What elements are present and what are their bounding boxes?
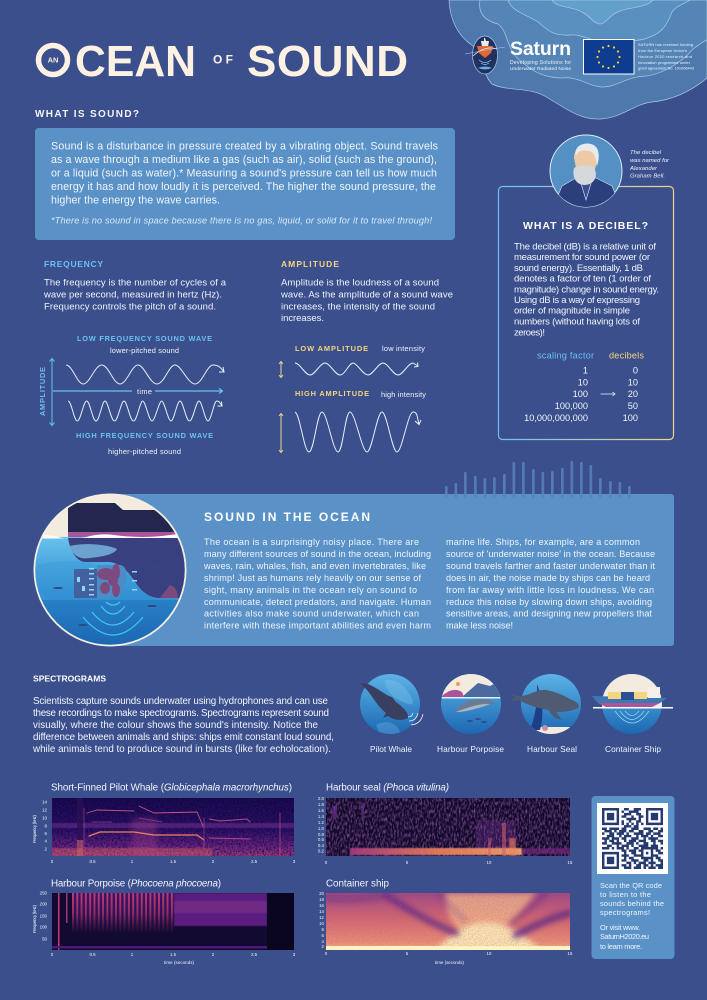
left column text: communicate, detect predators, and navigate. Human xyxy=(204,597,431,607)
axis labels xyxy=(32,890,296,965)
heading: what is sound: WHAT IS SOUND? xyxy=(35,109,139,120)
table: scaling factor to decibels: scaling factor xyxy=(537,350,594,360)
panel: what is sound: or a liquid (such as water).* Measuring a sound's pressure can tell us how much xyxy=(51,168,437,180)
table: scaling factor to decibels: 10 xyxy=(628,378,638,388)
left column text: sight, many animals in the ocean rely on sound to xyxy=(204,585,417,595)
EU funding text: innovation programme under xyxy=(638,60,691,65)
panel: what is sound: higher the energy the wave carries. xyxy=(51,194,220,206)
axis labels: 1.5 xyxy=(170,859,177,864)
panel: what is a decibel xyxy=(498,186,674,440)
high frequency wave xyxy=(68,401,222,421)
axis labels: 0.8 xyxy=(318,832,325,837)
panel: what is a decibel: WHAT IS A DECIBEL? xyxy=(523,220,648,232)
axis labels: 1.8 xyxy=(318,802,325,807)
amplitude diagram: low intensity xyxy=(382,344,425,353)
panel: what is a decibel: magnitude) change in sound energy. xyxy=(514,284,659,296)
axis labels: 3 xyxy=(293,952,296,957)
panel: what is a decibel: sound energy). Essentially, 1 dB xyxy=(514,263,643,274)
axis labels: 8 xyxy=(45,824,48,828)
frequency diagram: lower-pitched sound xyxy=(110,346,179,355)
spectrogram: container ship: Container ship xyxy=(326,878,390,890)
axis labels: Frequency (kHz) xyxy=(32,814,37,843)
axis labels: time (seconds) xyxy=(164,960,195,965)
axis labels: 4 xyxy=(45,838,48,844)
spectrograms text xyxy=(32,696,334,755)
axis labels: 1.0 xyxy=(318,826,325,831)
axis labels: 10 xyxy=(487,951,492,956)
spectrograms text: while animals tend to produce sound in bursts (like for echolocation). xyxy=(32,744,331,755)
low amplitude arrow xyxy=(279,362,283,378)
right column text: make less noise! xyxy=(446,620,513,630)
axis labels: 10 xyxy=(42,816,48,820)
EU funding text: SATURN has received funding xyxy=(638,42,693,47)
axis labels: 2 xyxy=(45,846,48,852)
axis labels xyxy=(32,800,296,864)
axis labels: 1.4 xyxy=(318,814,325,819)
high amplitude wave xyxy=(295,412,421,452)
axis labels: 0 xyxy=(51,952,54,957)
axis labels: 0.5 xyxy=(89,952,96,957)
frequency text: wave per second, measured in hertz (Hz). xyxy=(43,290,222,300)
panel: what is sound: energy it has and how loudly it is perceived. The higher the sound pressure, the xyxy=(51,181,436,193)
axis labels: 50 xyxy=(42,936,48,942)
spectrogram: harbour porpoise: Harbour Porpoise (Phocoena phocoena) xyxy=(51,878,221,890)
panel: what is a decibel: zeroes)! xyxy=(514,328,545,338)
icon labels xyxy=(370,744,661,754)
right column text: source of 'underwater noise' in the ocean. Because xyxy=(446,549,655,559)
axis labels: 14 xyxy=(42,800,48,804)
amplitude axis xyxy=(50,358,54,426)
table: scaling factor to decibels: 100,000 xyxy=(555,401,588,411)
axis labels: 0.2 xyxy=(318,848,325,854)
axis labels: 2.5 xyxy=(251,859,258,864)
QR caption: to listen to the xyxy=(600,890,651,899)
waveform bars xyxy=(445,461,631,498)
axis labels: 150 xyxy=(40,914,48,918)
panel: what is a decibel: order of magnitude in simple xyxy=(514,306,630,316)
right column text: sensitive areas, and designing new propellers that xyxy=(446,608,652,618)
icon: harbour porpoise xyxy=(441,674,501,734)
EU funding text: grant agreement No. 101006443 xyxy=(638,66,694,70)
amplitude text: AMPLITUDE xyxy=(281,259,339,269)
left column text: many different sources of sound in the ocean, including xyxy=(204,549,431,559)
icon labels: Pilot Whale xyxy=(370,744,412,754)
QR caption: Or visit www. xyxy=(600,923,640,932)
axis labels: 15 xyxy=(568,860,573,865)
left column text: The ocean is a surprisingly noisy place. There are xyxy=(204,537,419,547)
axis labels: 1.6 xyxy=(318,808,325,813)
title: AN xyxy=(48,56,58,64)
amplitude diagram: LOW AMPLITUDE xyxy=(295,344,368,353)
panel: what is a decibel: denotes a factor of ten (1 order of xyxy=(514,274,651,284)
QR caption: SaturnH2020.eu xyxy=(600,932,649,941)
amplitude text xyxy=(280,259,453,324)
frequency text xyxy=(43,259,227,312)
axis labels: 2.0 xyxy=(318,796,325,801)
QR code xyxy=(597,803,668,874)
table: scaling factor to decibels: 10 xyxy=(578,378,588,388)
axis labels: 250 xyxy=(40,890,48,896)
amplitude text: wave. As the amplitude of a sound wave xyxy=(280,290,453,300)
axis labels: 14 xyxy=(319,909,325,914)
axis labels: 16 xyxy=(319,903,325,908)
panel: what is a decibel: measurement for sound power (or xyxy=(514,252,650,263)
frequency diagram: higher-pitched sound xyxy=(108,447,181,456)
amplitude diagram xyxy=(279,344,426,452)
spectrograms text: difference between animals and ships: ships emit constant loud sound, xyxy=(33,732,334,743)
axis labels: 6 xyxy=(322,933,325,938)
illustration: ship propeller underwater xyxy=(30,490,190,650)
axis labels: 10 xyxy=(319,921,325,926)
spectrogram: pilot whale xyxy=(32,782,296,864)
amplitude text: increases, the intensity of the sound xyxy=(281,302,435,312)
EU funding text xyxy=(638,42,694,70)
right column text: does in air, the noise made by ships can be heard xyxy=(446,573,650,583)
frequency diagram xyxy=(38,334,224,456)
axis labels: 2.5 xyxy=(251,952,258,957)
left column text: shrimp! Just as humans rely heavily on our sense of xyxy=(204,573,421,583)
title: OF xyxy=(213,52,233,66)
panel: what is a decibel: Using dB is a way of expressing xyxy=(514,295,640,306)
panel: what is sound: *There is no sound in space because there is no gas, liquid, or solid for it to travel through! xyxy=(51,216,432,226)
QR caption: spectrograms! xyxy=(600,908,650,917)
portrait caption xyxy=(629,150,670,180)
axis labels: 5 xyxy=(406,951,409,956)
axis labels: 8 xyxy=(322,927,325,932)
axis labels: 0 xyxy=(51,859,54,864)
QR caption: Scan the QR code xyxy=(600,881,662,890)
spectrograms text: these recordings to make spectrograms. Spectrograms represent sound xyxy=(33,708,329,719)
icon: harbour seal xyxy=(510,674,581,734)
portrait caption: was named for xyxy=(630,158,670,164)
left column text: interfere with these important abilities and even harm xyxy=(204,620,431,630)
axis labels: 2 xyxy=(322,944,325,949)
axis labels: 2 xyxy=(212,952,215,957)
axis labels: Frequency (kHz) xyxy=(32,904,37,933)
axis labels: 12 xyxy=(319,915,325,920)
table: scaling factor to decibels xyxy=(524,350,644,423)
panel: sound in the ocean xyxy=(105,494,674,646)
portrait caption: Alexander xyxy=(629,166,658,172)
QR caption: sounds behind the xyxy=(600,899,664,908)
logo: Saturn xyxy=(465,36,571,74)
axis labels: 1 xyxy=(131,859,134,864)
EU funding text: Horizon 2020 research and xyxy=(638,54,692,59)
axis labels: 200 xyxy=(40,902,48,906)
axis labels xyxy=(319,891,573,965)
left column text xyxy=(203,537,431,630)
portrait caption: Graham Bell. xyxy=(630,174,665,180)
axis labels: 4 xyxy=(322,939,325,944)
amplitude text: Amplitude is the loudness of a sound xyxy=(281,278,439,288)
table: scaling factor to decibels: decibels xyxy=(609,350,644,360)
amplitude text: increases. xyxy=(281,313,324,324)
QR caption xyxy=(600,881,664,951)
frequency text: Frequency controls the pitch of a sound. xyxy=(44,302,216,312)
title: CEAN xyxy=(75,37,196,86)
axis labels: 20 xyxy=(319,891,325,896)
right column text: from far away with little loss in loudness. We can xyxy=(446,585,654,595)
panel: what is sound xyxy=(35,128,455,240)
axis labels: 3 xyxy=(293,859,296,864)
axis labels: 2 xyxy=(212,859,215,864)
panel: what is a decibel: The decibel (dB) is a relative unit of xyxy=(514,242,656,252)
axis labels: 1 xyxy=(131,952,134,957)
EU flag xyxy=(584,40,634,74)
frequency diagram: AMPLITUDE xyxy=(38,367,47,416)
panel: what is sound: Sound is a disturbance in pressure created by a vibrating object. Sound travels xyxy=(51,140,438,152)
axis labels: 6 xyxy=(45,831,48,836)
spectrogram: pilot whale: Short-Finned Pilot Whale (Globicephala macrorhynchus) xyxy=(51,782,292,794)
panel: sound in the ocean: SOUND IN THE OCEAN xyxy=(204,510,370,524)
axis labels: 12 xyxy=(42,808,48,812)
frequency diagram: time xyxy=(137,387,152,396)
axis labels: 0.5 xyxy=(89,859,96,864)
low frequency wave xyxy=(66,365,224,384)
axis labels: 1.2 xyxy=(318,820,325,825)
icon labels: Container Ship xyxy=(605,744,661,754)
icon labels: Harbour Porpoise xyxy=(437,744,504,754)
right column text: sound travels farther and faster underwater than it xyxy=(446,561,655,571)
spectrogram: harbour seal xyxy=(318,782,573,865)
logo: Saturn: Underwater Radiated Noise xyxy=(510,66,571,72)
axis labels: 0 xyxy=(325,860,328,865)
low amplitude wave xyxy=(295,362,418,375)
axis labels: 0 xyxy=(325,951,328,956)
panel: what is sound: as a wave through a medium like a gas (such as air), solid (such as the ground), xyxy=(51,154,437,166)
high amplitude arrow xyxy=(279,414,283,452)
EU funding text: from the European Union's xyxy=(638,48,687,53)
axis labels: 5 xyxy=(406,860,409,865)
axis labels: 15 xyxy=(568,951,573,956)
frequency text: The frequency is the number of cycles of a xyxy=(44,278,227,288)
amplitude diagram: high intensity xyxy=(381,390,426,399)
panel: what is a decibel: numbers (without having lots of xyxy=(514,316,640,328)
spectrogram: harbour seal: Harbour seal (Phoca vitulina) xyxy=(326,782,449,794)
table: scaling factor to decibels: 100 xyxy=(573,389,588,399)
logo: Saturn: Developing Solutions for xyxy=(510,60,571,66)
amplitude diagram: HIGH AMPLITUDE xyxy=(295,389,369,398)
table: scaling factor to decibels: 100 xyxy=(623,413,638,423)
portrait caption: The decibel xyxy=(630,150,662,156)
time axis xyxy=(53,388,222,394)
panel: QR code xyxy=(592,796,674,959)
left column text: activities also make sound underwater, which can xyxy=(204,608,419,618)
frequency diagram: HIGH FREQUENCY SOUND WAVE xyxy=(76,431,213,440)
contour blobs: top right xyxy=(449,0,707,119)
spectrograms text: Scientists capture sounds underwater using hydrophones and can use xyxy=(33,696,329,707)
axis labels xyxy=(318,796,573,865)
axis labels: 0.4 xyxy=(318,843,325,848)
spectrograms text: visually, where the colour shows the sound's intensity. Notice the xyxy=(33,720,319,731)
axis labels: 100 xyxy=(40,924,48,930)
icon: pilot whale xyxy=(360,674,423,736)
axis labels: 0.6 xyxy=(318,837,325,842)
table: scaling factor to decibels: 10,000,000,000 xyxy=(524,413,588,423)
title xyxy=(38,37,408,86)
heading: spectrograms: SPECTROGRAMS xyxy=(33,674,106,684)
right column text: reduce this noise by slowing down ships, avoiding xyxy=(446,597,652,607)
axis labels: time (seconds) xyxy=(435,960,465,965)
table: scaling factor to decibels: 20 xyxy=(628,389,638,399)
icon labels: Harbour Seal xyxy=(527,744,577,754)
spectrogram: container ship xyxy=(319,878,573,965)
logo: Saturn: Saturn xyxy=(510,38,571,60)
table: scaling factor to decibels: 50 xyxy=(628,401,638,411)
right column text: marine life. Ships, for example, are a common xyxy=(446,537,640,547)
QR caption: to learn more. xyxy=(600,942,642,951)
right column text xyxy=(446,537,655,630)
table: scaling factor to decibels: 1 xyxy=(583,366,588,376)
title: SOUND xyxy=(247,37,408,86)
axis labels: 10 xyxy=(487,860,492,865)
left column text: waves, rain, whales, fish, and even invertebrates, like xyxy=(203,561,426,571)
icon: container ship xyxy=(592,674,673,734)
frequency diagram: LOW FREQUENCY SOUND WAVE xyxy=(77,334,212,343)
axis labels: 18 xyxy=(319,897,325,902)
axis labels: 1.5 xyxy=(170,952,177,957)
portrait: Alexander Graham Bell xyxy=(550,135,622,210)
table: scaling factor to decibels: 0 xyxy=(633,366,638,376)
spectrogram: harbour porpoise xyxy=(32,878,296,965)
frequency text: FREQUENCY xyxy=(44,259,103,269)
